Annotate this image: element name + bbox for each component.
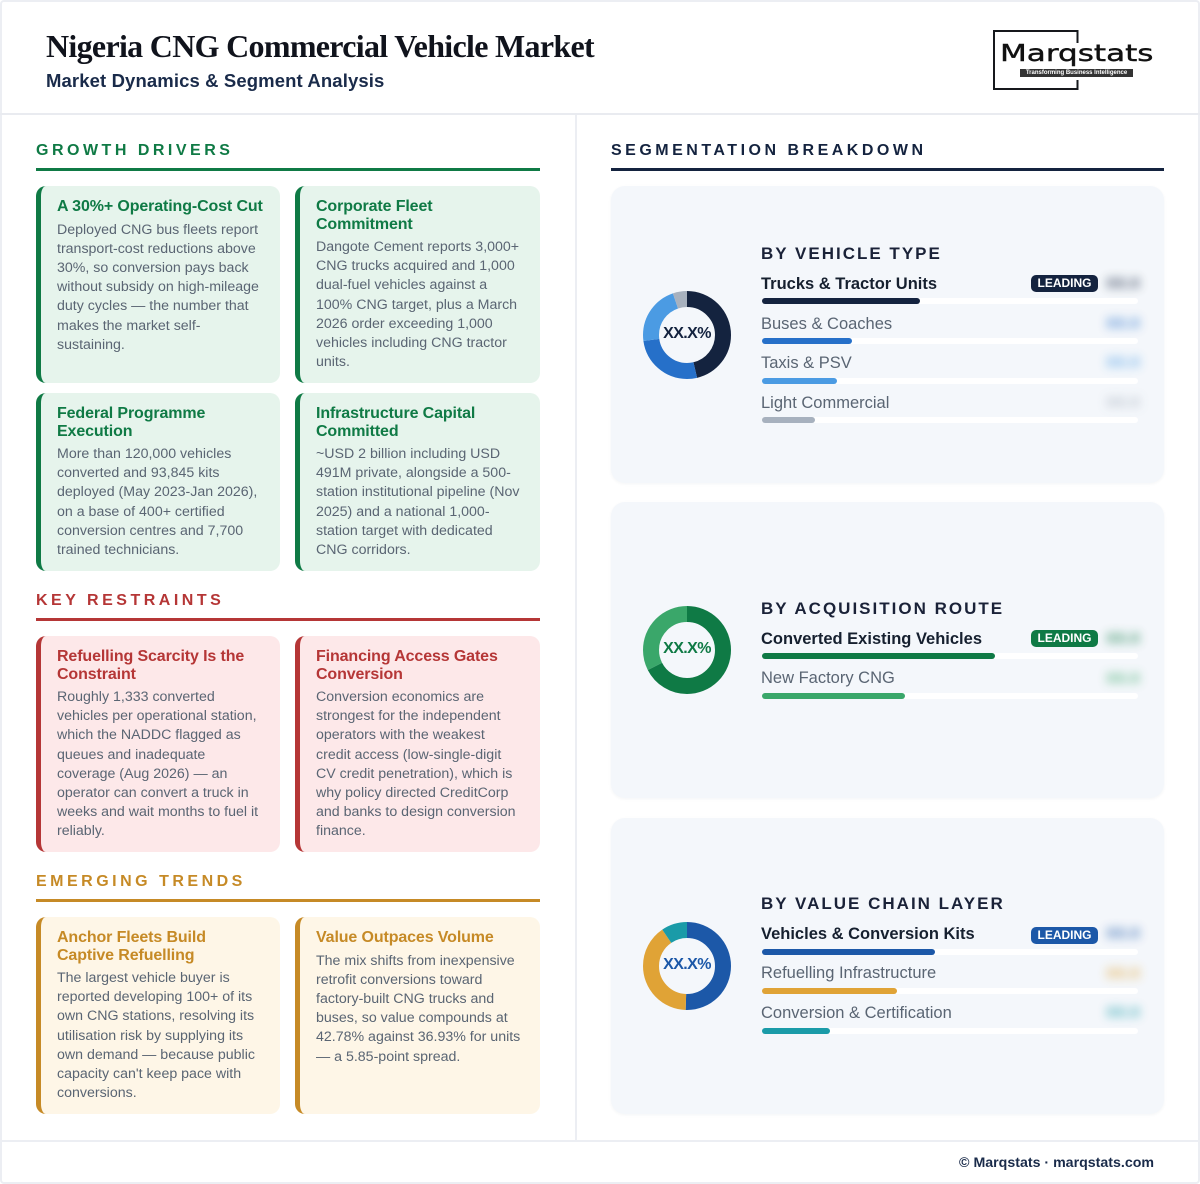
card: refuelling scarcity: [36, 636, 280, 852]
card: financing access: and banks to design conversion: [316, 804, 516, 820]
card: financing access: CV credit penetration), which is: [316, 766, 512, 782]
card: financing access: credit access (low-single-digit: [316, 747, 501, 763]
panel heading: BY ACQUISITION ROUTE: [761, 599, 1004, 618]
donut: value chain: XX.X%: [663, 956, 711, 973]
card: federal programme: on a base of 400+ certified: [57, 504, 225, 520]
badge: [1031, 630, 1098, 647]
card: infrastructure capital: [295, 393, 540, 571]
card: refuelling scarcity: Roughly 1,333 converted: [57, 689, 215, 705]
bar: [762, 417, 1138, 423]
card: operating-cost cut: A 30%+ Operating-Cost Cut: [57, 198, 263, 215]
heading: key restraints: KEY RESTRAINTS: [36, 592, 224, 609]
donut: acquisition route: [643, 606, 731, 694]
row: buses: Buses & Coaches: [761, 315, 892, 333]
row: light commercial: Light Commercial: [761, 394, 889, 412]
card: infrastructure capital: station institutional pipeline (Nov: [316, 484, 519, 500]
card: refuelling scarcity: which the NADDC flagged as: [57, 727, 241, 743]
title: Nigeria CNG Commercial Vehicle Market: [46, 28, 594, 64]
card: corporate fleet: 2026 order exceeding 1,000: [316, 316, 493, 332]
blurred value: XX.X: [1106, 630, 1140, 647]
card: value outpaces volume: — a 5.85-point spread.: [316, 1049, 460, 1065]
card: corporate fleet: 100% CNG target, plus a March: [316, 297, 517, 313]
card: federal programme: [36, 393, 280, 571]
card: infrastructure capital: Infrastructure Capital: [316, 405, 475, 422]
bar: [762, 949, 1138, 955]
card: refuelling scarcity: operator can convert a truck in: [57, 785, 249, 801]
card: value outpaces volume: 42.78% against 36.93% for units: [316, 1029, 520, 1045]
logo tagline: Transforming Business Intelligence: [1026, 70, 1127, 76]
card: value outpaces volume: retrofit conversions toward: [316, 972, 482, 988]
panel: by vehicle type: [611, 186, 1164, 483]
panel heading: BY VEHICLE TYPE: [761, 244, 942, 263]
card: operating-cost cut: Deployed CNG bus fleets report: [57, 222, 258, 238]
card: value outpaces volume: The mix shifts from inexpensive: [316, 952, 515, 968]
logo wordmark: Marqstats: [1000, 41, 1153, 67]
bar: [762, 378, 1138, 384]
card: financing access: Conversion economics are: [316, 689, 484, 705]
blurred value: XX.X: [1106, 275, 1140, 292]
card: corporate fleet: Commitment: [316, 216, 413, 232]
card: financing access: Conversion: [316, 666, 403, 682]
card: value outpaces volume: Value Outpaces Volume: [316, 929, 494, 946]
card: corporate fleet: dual-fuel vehicles against a: [316, 277, 487, 293]
card: federal programme: trained technicians.: [57, 542, 179, 558]
card: operating-cost cut: [36, 186, 280, 383]
card: corporate fleet: units.: [316, 354, 350, 370]
donut: acquisition route: XX.X%: [663, 640, 711, 657]
card: financing access: why policy directed CreditCorp: [316, 785, 508, 801]
heading: emerging trends: EMERGING TRENDS: [36, 873, 246, 890]
card: federal programme: converted and 93,845 kits: [57, 465, 219, 481]
card: value outpaces volume: [295, 917, 540, 1114]
row: converted: Converted Existing Vehicles: [761, 630, 982, 648]
card: corporate fleet: CNG trucks acquired and 1,000: [316, 258, 515, 274]
row: refuelling infrastructure: Refuelling Infrastructure: [761, 964, 936, 982]
panel: by acquisition route: [611, 502, 1164, 798]
card: anchor fleets: own CNG stations, resolving its: [57, 1008, 254, 1024]
card: operating-cost cut: makes the market self-: [57, 318, 200, 334]
card: operating-cost cut: without subsidy on high-mileage: [57, 279, 259, 295]
card: financing access: operators with the weakest: [316, 727, 485, 743]
card: refuelling scarcity: coverage (Aug 2026) — an: [57, 766, 227, 782]
logo frame: [993, 30, 1078, 90]
subtitle: Market Dynamics & Segment Analysis: [46, 70, 384, 91]
card: refuelling scarcity: Constraint: [57, 666, 136, 682]
card: infrastructure capital: station target with dedicated: [316, 523, 493, 539]
heading: segmentation breakdown: SEGMENTATION BREAKDOWN: [611, 142, 927, 159]
row: trucks: Trucks & Tractor Units: [761, 275, 937, 293]
card: federal programme: More than 120,000 vehicles: [57, 446, 231, 462]
card: refuelling scarcity: Refuelling Scarcity Is the: [57, 648, 244, 665]
donut: value chain: [643, 922, 731, 1010]
card: federal programme: Execution: [57, 422, 132, 440]
card: financing access: finance.: [316, 823, 366, 839]
card: infrastructure capital: CNG corridors.: [316, 542, 411, 558]
card: federal programme: Federal Programme: [57, 405, 205, 422]
card: value outpaces volume: buses, so value compounds at: [316, 1010, 508, 1026]
heading: growth drivers: GROWTH DRIVERS: [36, 142, 233, 159]
card: anchor fleets: Captive Refuelling: [57, 946, 194, 964]
card: federal programme: deployed (May 2023-Jan 2026),: [57, 484, 257, 500]
card: anchor fleets: [36, 917, 280, 1114]
footer credit: © Marqstats · marqstats.com: [959, 1155, 1154, 1171]
donut: vehicle type: XX.X%: [663, 325, 711, 342]
badge: LEADING: [1038, 928, 1092, 942]
card: infrastructure capital: 491M private, alongside a 500-: [316, 465, 511, 481]
badge: [1031, 275, 1098, 292]
card: operating-cost cut: duty cycles — the number that: [57, 298, 249, 314]
header: [0, 0, 1200, 115]
row: vehicles and kits: Vehicles & Conversion Kits: [761, 925, 975, 943]
card: anchor fleets: Anchor Fleets Build: [57, 929, 206, 946]
card: refuelling scarcity: weeks and wait months to fuel it: [57, 804, 258, 820]
card: anchor fleets: reported developing 100+ of its: [57, 989, 252, 1005]
card: refuelling scarcity: reliably.: [57, 823, 105, 839]
row: conversion and certification: Conversion & Certification: [761, 1004, 952, 1022]
card: anchor fleets: The largest vehicle buyer is: [57, 970, 230, 986]
blurred value: XX.X: [1106, 394, 1140, 411]
card: infrastructure capital: 2025) and a national 1,000-: [316, 504, 490, 520]
row: new factory: New Factory CNG: [761, 669, 895, 687]
panel heading: BY VALUE CHAIN LAYER: [761, 894, 1005, 913]
card: financing access: Financing Access Gates: [316, 648, 498, 665]
logo tagline: [1020, 69, 1133, 77]
card: federal programme: conversion centres and 7,700: [57, 523, 243, 539]
card: value outpaces volume: factory-built CNG trucks and: [316, 991, 494, 1007]
bar: [762, 988, 1138, 994]
card: corporate fleet: vehicles including CNG tractor: [316, 335, 507, 351]
blurred value: XX.X: [1106, 354, 1140, 371]
bar: [762, 338, 1138, 344]
card: financing access: strongest for the independent: [316, 708, 501, 724]
card: operating-cost cut: transport-cost reductions above: [57, 241, 256, 257]
donut: vehicle type: [643, 291, 731, 379]
column divider: [575, 115, 577, 1140]
card: corporate fleet: Dangote Cement reports 3,000+: [316, 239, 519, 255]
card: anchor fleets: utilisation risk by supplying its: [57, 1028, 243, 1044]
row: taxis: Taxis & PSV: [761, 354, 852, 372]
badge: LEADING: [1038, 631, 1092, 645]
blurred value: XX.X: [1106, 670, 1140, 687]
card: corporate fleet: Corporate Fleet: [316, 198, 432, 215]
card: infrastructure capital: ~USD 2 billion including USD: [316, 446, 500, 462]
blurred value: XX.X: [1106, 925, 1140, 942]
bar: [762, 1028, 1138, 1034]
card: refuelling scarcity: queues and inadequate: [57, 747, 205, 763]
card: anchor fleets: own demand — because public: [57, 1047, 255, 1063]
panel: by value chain layer: [611, 818, 1164, 1114]
card: anchor fleets: conversions.: [57, 1085, 137, 1101]
bar: [762, 653, 1138, 659]
card: corporate fleet: [295, 186, 540, 383]
card: operating-cost cut: 30%, so conversion pays back: [57, 260, 249, 276]
card: financing access: [295, 636, 540, 852]
badge: LEADING: [1038, 276, 1092, 290]
bar: [762, 298, 1138, 304]
logo: [993, 30, 1153, 90]
blurred value: XX.X: [1106, 965, 1140, 982]
blurred value: XX.X: [1106, 315, 1140, 332]
card: operating-cost cut: sustaining.: [57, 337, 125, 353]
footer: [0, 1140, 1200, 1184]
bar: [762, 693, 1138, 699]
card: infrastructure capital: Committed: [316, 422, 398, 440]
card: anchor fleets: capacity can't keep pace with: [57, 1066, 241, 1082]
card: refuelling scarcity: vehicles per operational station,: [57, 708, 257, 724]
blurred value: XX.X: [1106, 1004, 1140, 1021]
badge: [1031, 927, 1098, 944]
